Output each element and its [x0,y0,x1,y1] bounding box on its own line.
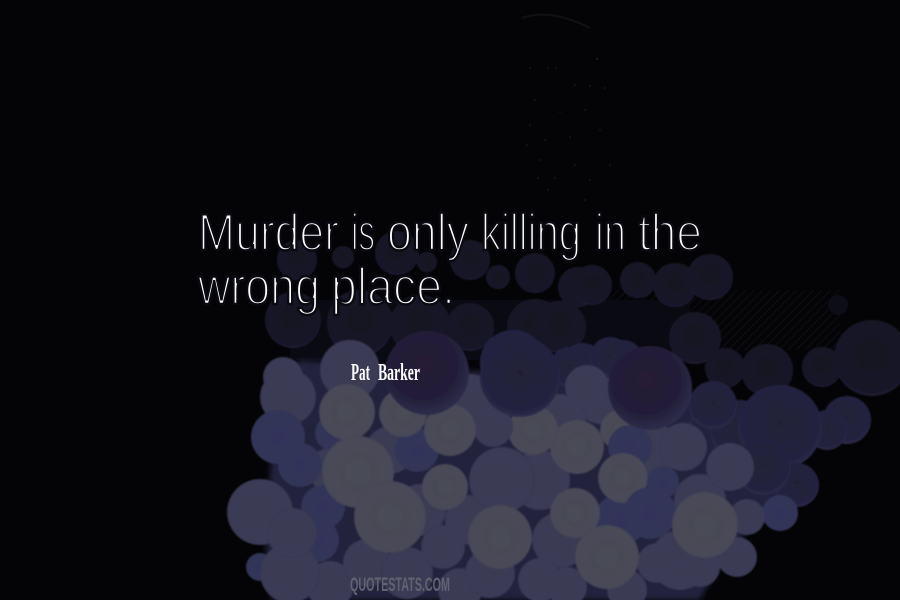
quote line 1 [198,204,702,262]
quote line 1: Murder [198,204,339,262]
quote line 2 [197,258,455,316]
author name [351,360,420,386]
quote line 2: wrong [197,258,320,316]
watermark: QUOTESTATS.COM [350,575,450,596]
netting behind balloons [290,290,840,360]
city tower with faint lights [522,15,611,201]
filler balloons behind the cluster [306,374,770,600]
quote line 1: only [387,204,469,262]
lower balloons [227,357,765,600]
balloon mass shadow [265,360,790,600]
quote line 1: in [595,204,626,262]
quote line 1: the [638,204,702,262]
middle balloons [320,330,871,531]
author name: Pat [351,360,370,386]
author name: Barker [378,360,420,386]
large dark purple balloons [385,331,692,430]
balloon cluster [227,231,900,600]
quote text [197,204,702,316]
quote line 1: is [351,204,375,262]
upper dark balloons [265,231,900,396]
quote line 2: place. [331,258,455,316]
quote line 1: killing [481,204,581,262]
